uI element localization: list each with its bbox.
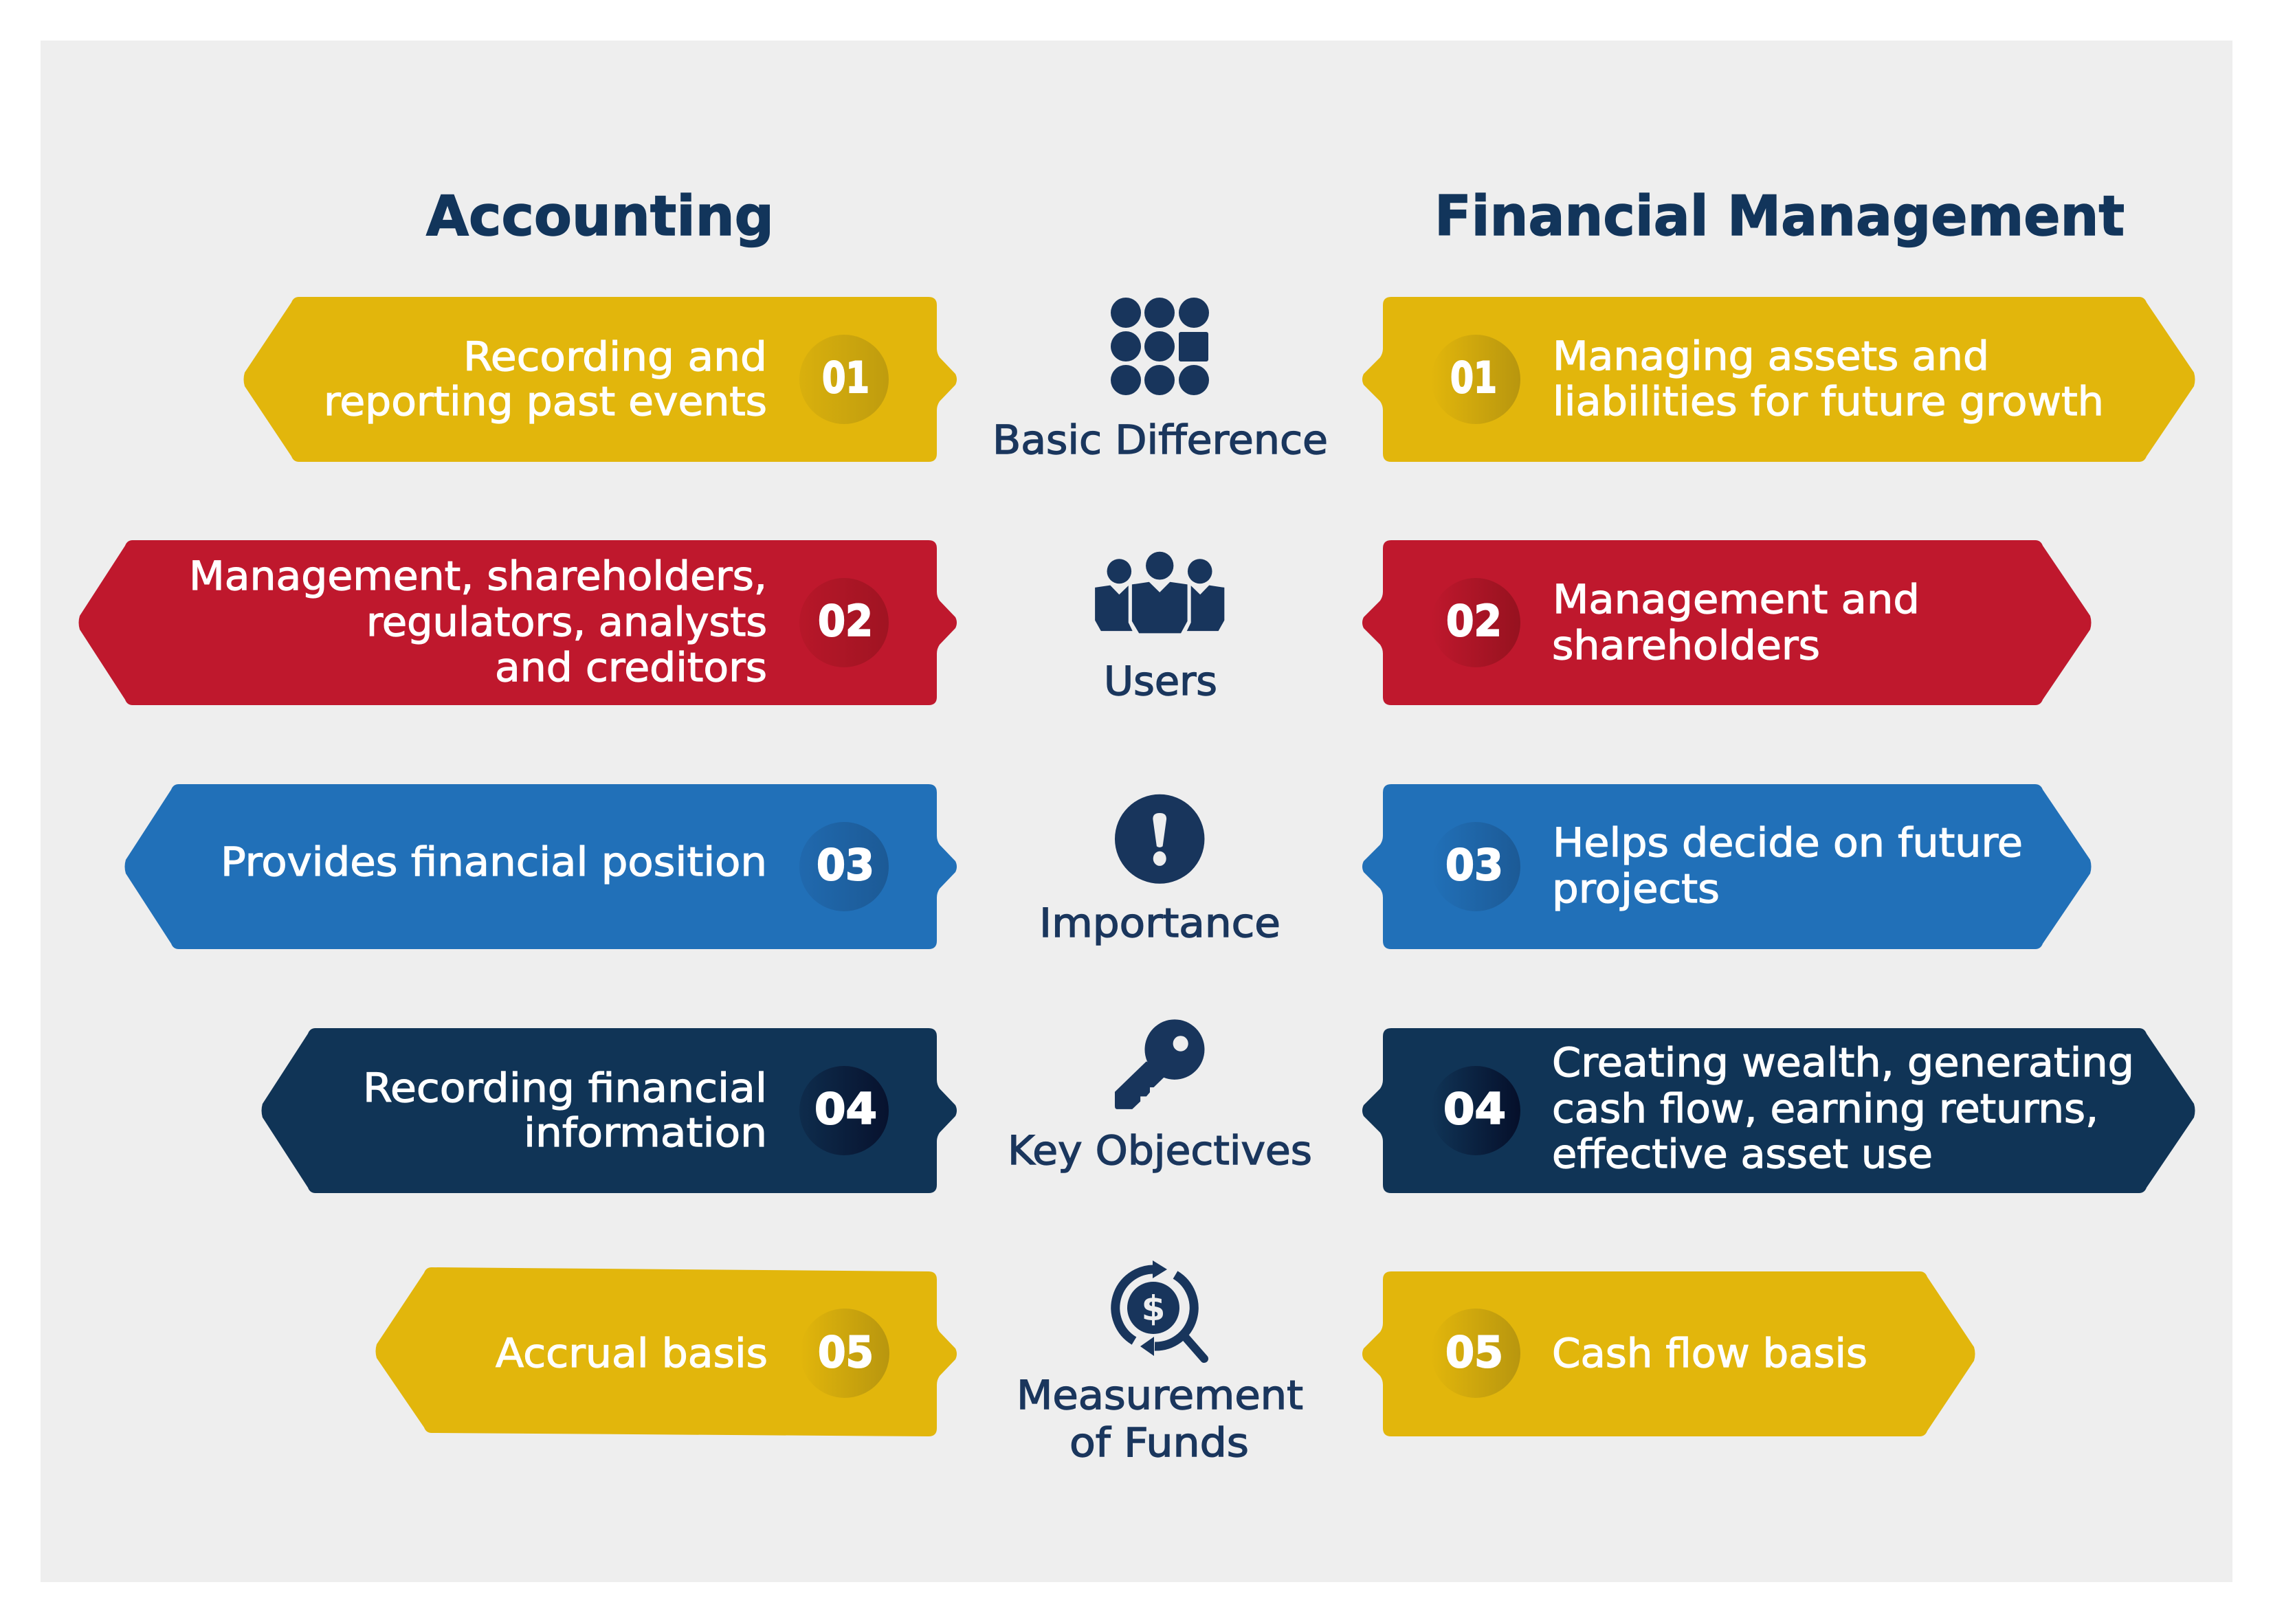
label: Users: Users bbox=[1104, 658, 1217, 704]
financial management row 03: projects bbox=[1552, 865, 1720, 912]
icon: measurement of funds: $ bbox=[1142, 1289, 1165, 1328]
heading: Accounting: Accounting bbox=[426, 184, 774, 248]
heading: Financial Management: Financial Management bbox=[1434, 184, 2125, 248]
accounting row 01: reporting past events bbox=[324, 378, 767, 425]
icon: key bbox=[1115, 1019, 1204, 1109]
financial management row 02 bbox=[1362, 540, 2091, 705]
financial management row 04: cash flow, earning returns, bbox=[1552, 1085, 2098, 1132]
financial management row 03 bbox=[1362, 784, 2091, 949]
financial management row 04 bbox=[1362, 1028, 2195, 1193]
financial management row 03: Helps decide on future bbox=[1553, 819, 2023, 866]
icon: measurement of funds bbox=[1116, 1260, 1204, 1359]
financial management row 05: Cash flow basis bbox=[1552, 1330, 1867, 1377]
label: Measurement of Funds bbox=[1017, 1372, 1303, 1466]
financial management row 03: 03 bbox=[1445, 840, 1503, 890]
label: Measurement of Funds: Measurement bbox=[1017, 1372, 1303, 1419]
financial management row 02: 02 bbox=[1446, 596, 1502, 646]
financial management row 05 bbox=[1362, 1271, 1975, 1436]
accounting row 02: Management, shareholders, bbox=[189, 553, 767, 599]
label: Key Objectives: Key Objectives bbox=[1008, 1127, 1312, 1174]
label: Basic Difference: Basic Difference bbox=[993, 416, 1328, 463]
label: Measurement of Funds: of Funds bbox=[1069, 1419, 1249, 1466]
financial management row 02: Management and bbox=[1553, 576, 1920, 623]
financial management row 05: 05 bbox=[1445, 1327, 1503, 1377]
accounting row 01: 01 bbox=[822, 353, 869, 403]
accounting row 04: 04 bbox=[814, 1084, 877, 1134]
accounting row 05: Accrual basis bbox=[496, 1330, 768, 1377]
accounting row 03 bbox=[125, 784, 957, 949]
financial management row 04: 04 bbox=[1443, 1084, 1506, 1134]
financial management row 01: liabilities for future growth bbox=[1553, 378, 2104, 425]
financial management row 02: shareholders bbox=[1552, 622, 1820, 669]
accounting row 05: 05 bbox=[818, 1327, 874, 1377]
financial management row 01 bbox=[1362, 297, 2195, 462]
accounting row 04 bbox=[261, 1028, 957, 1193]
accounting row 02: 02 bbox=[818, 596, 873, 646]
accounting row 03: 03 bbox=[817, 840, 874, 890]
accounting row 02: regulators, analysts bbox=[366, 599, 767, 645]
icon: users bbox=[1095, 552, 1224, 633]
financial management row 04: effective asset use bbox=[1552, 1131, 1933, 1177]
icon: importance exclamation bbox=[1115, 794, 1204, 884]
financial management row 01: 01 bbox=[1450, 353, 1497, 403]
icon: basic difference grid bbox=[1111, 298, 1209, 395]
accounting row 04: information bbox=[524, 1109, 767, 1156]
financial management row 04: Creating wealth, generating bbox=[1552, 1039, 2134, 1086]
accounting row 03: Provides financial position bbox=[221, 838, 767, 885]
accounting row 05 bbox=[375, 1267, 957, 1436]
accounting row 04: Recording financial bbox=[363, 1065, 767, 1111]
financial management row 01: Managing assets and bbox=[1553, 333, 1989, 379]
accounting row 01: Recording and bbox=[463, 333, 767, 380]
accounting row 02 bbox=[78, 540, 957, 705]
accounting row 02: and creditors bbox=[495, 644, 767, 691]
accounting row 01 bbox=[243, 297, 957, 462]
label: Importance: Importance bbox=[1039, 900, 1280, 946]
